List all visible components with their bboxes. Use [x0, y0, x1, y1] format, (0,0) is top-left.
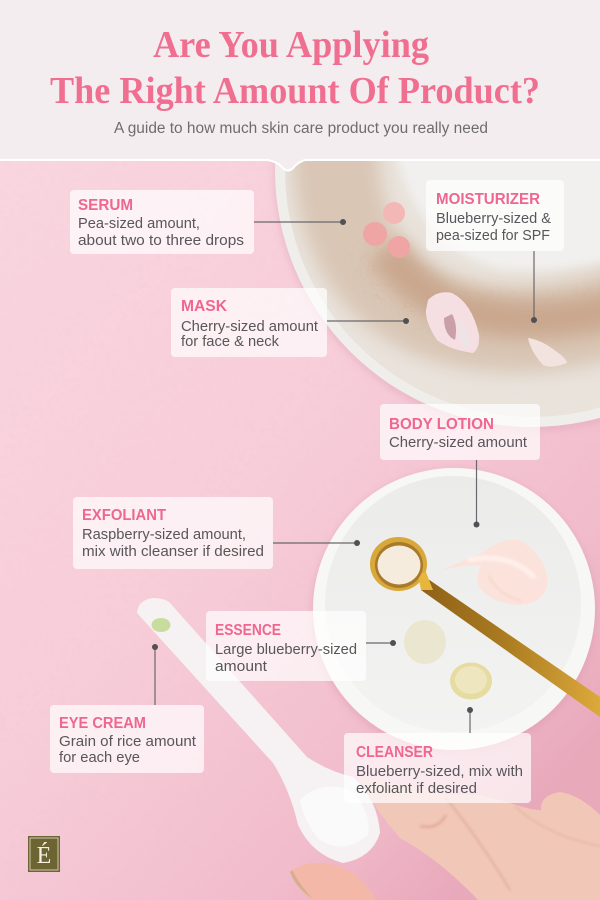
body lotion swirl [439, 540, 548, 605]
callout: essence [206, 611, 396, 681]
gold spoon with exfoliant [370, 537, 600, 717]
callout: eye cream: EYE CREAM [59, 715, 146, 732]
subtitle: A guide to how much skin care product you really need [114, 120, 488, 137]
callout: moisturizer: Blueberry-sized & [436, 210, 551, 227]
essence pool [404, 620, 446, 664]
callout: essence: ESSENCE [215, 622, 281, 639]
callout: eye cream: for each eye [59, 749, 140, 766]
callout: body lotion: Cherry-sized amount [389, 434, 528, 451]
callout: moisturizer: MOISTURIZER [436, 191, 540, 208]
callout: moisturizer: pea-sized for SPF [436, 227, 550, 244]
serum drops [363, 202, 410, 258]
callout: eye cream [50, 644, 204, 773]
mask dollop [426, 292, 479, 353]
callout: serum: about two to three drops [78, 232, 244, 249]
hand with fingers [360, 778, 600, 900]
callout: cleanser: exfoliant if desired [356, 780, 477, 797]
title [50, 24, 540, 112]
callout: exfoliant: EXFOLIANT [82, 507, 166, 524]
white mother-of-pearl spoon [137, 598, 380, 863]
callout: body lotion: BODY LOTION [389, 416, 494, 433]
callout: exfoliant: mix with cleanser if desired [82, 543, 264, 560]
callout: mask: MASK [181, 298, 227, 315]
callout: moisturizer [426, 180, 564, 323]
callout: serum: Pea-sized amount, [78, 215, 200, 232]
small white dish [312, 468, 596, 754]
callout: cleanser: CLEANSER [356, 744, 433, 761]
callout: serum [70, 190, 346, 254]
callout: body lotion [380, 404, 540, 528]
large ceramic plate with brown glaze [272, 161, 600, 430]
eye cream dot [152, 618, 170, 632]
callout: exfoliant [73, 497, 360, 569]
title: The Right Amount Of Product? [50, 70, 540, 112]
callout: exfoliant: Raspberry-sized amount, [82, 526, 246, 543]
moisturizer SPF dab [528, 338, 567, 367]
callout: serum: SERUM [78, 197, 133, 214]
callout: mask: Cherry-sized amount [181, 318, 319, 335]
logo: brand monogram: É [37, 843, 51, 869]
logo: brand monogram [28, 836, 60, 872]
callout: cleanser [344, 707, 531, 803]
callout: essence: amount [215, 658, 268, 675]
callout: eye cream: Grain of rice amount [59, 733, 197, 750]
thumb [290, 863, 376, 900]
callout: essence: Large blueberry-sized [215, 641, 357, 658]
title: Are You Applying [153, 24, 429, 66]
cleanser pool [450, 662, 492, 700]
callout: mask [171, 288, 409, 357]
header band [0, 0, 600, 170]
callout: mask: for face & neck [181, 333, 279, 350]
callout: cleanser: Blueberry-sized, mix with [356, 763, 523, 780]
